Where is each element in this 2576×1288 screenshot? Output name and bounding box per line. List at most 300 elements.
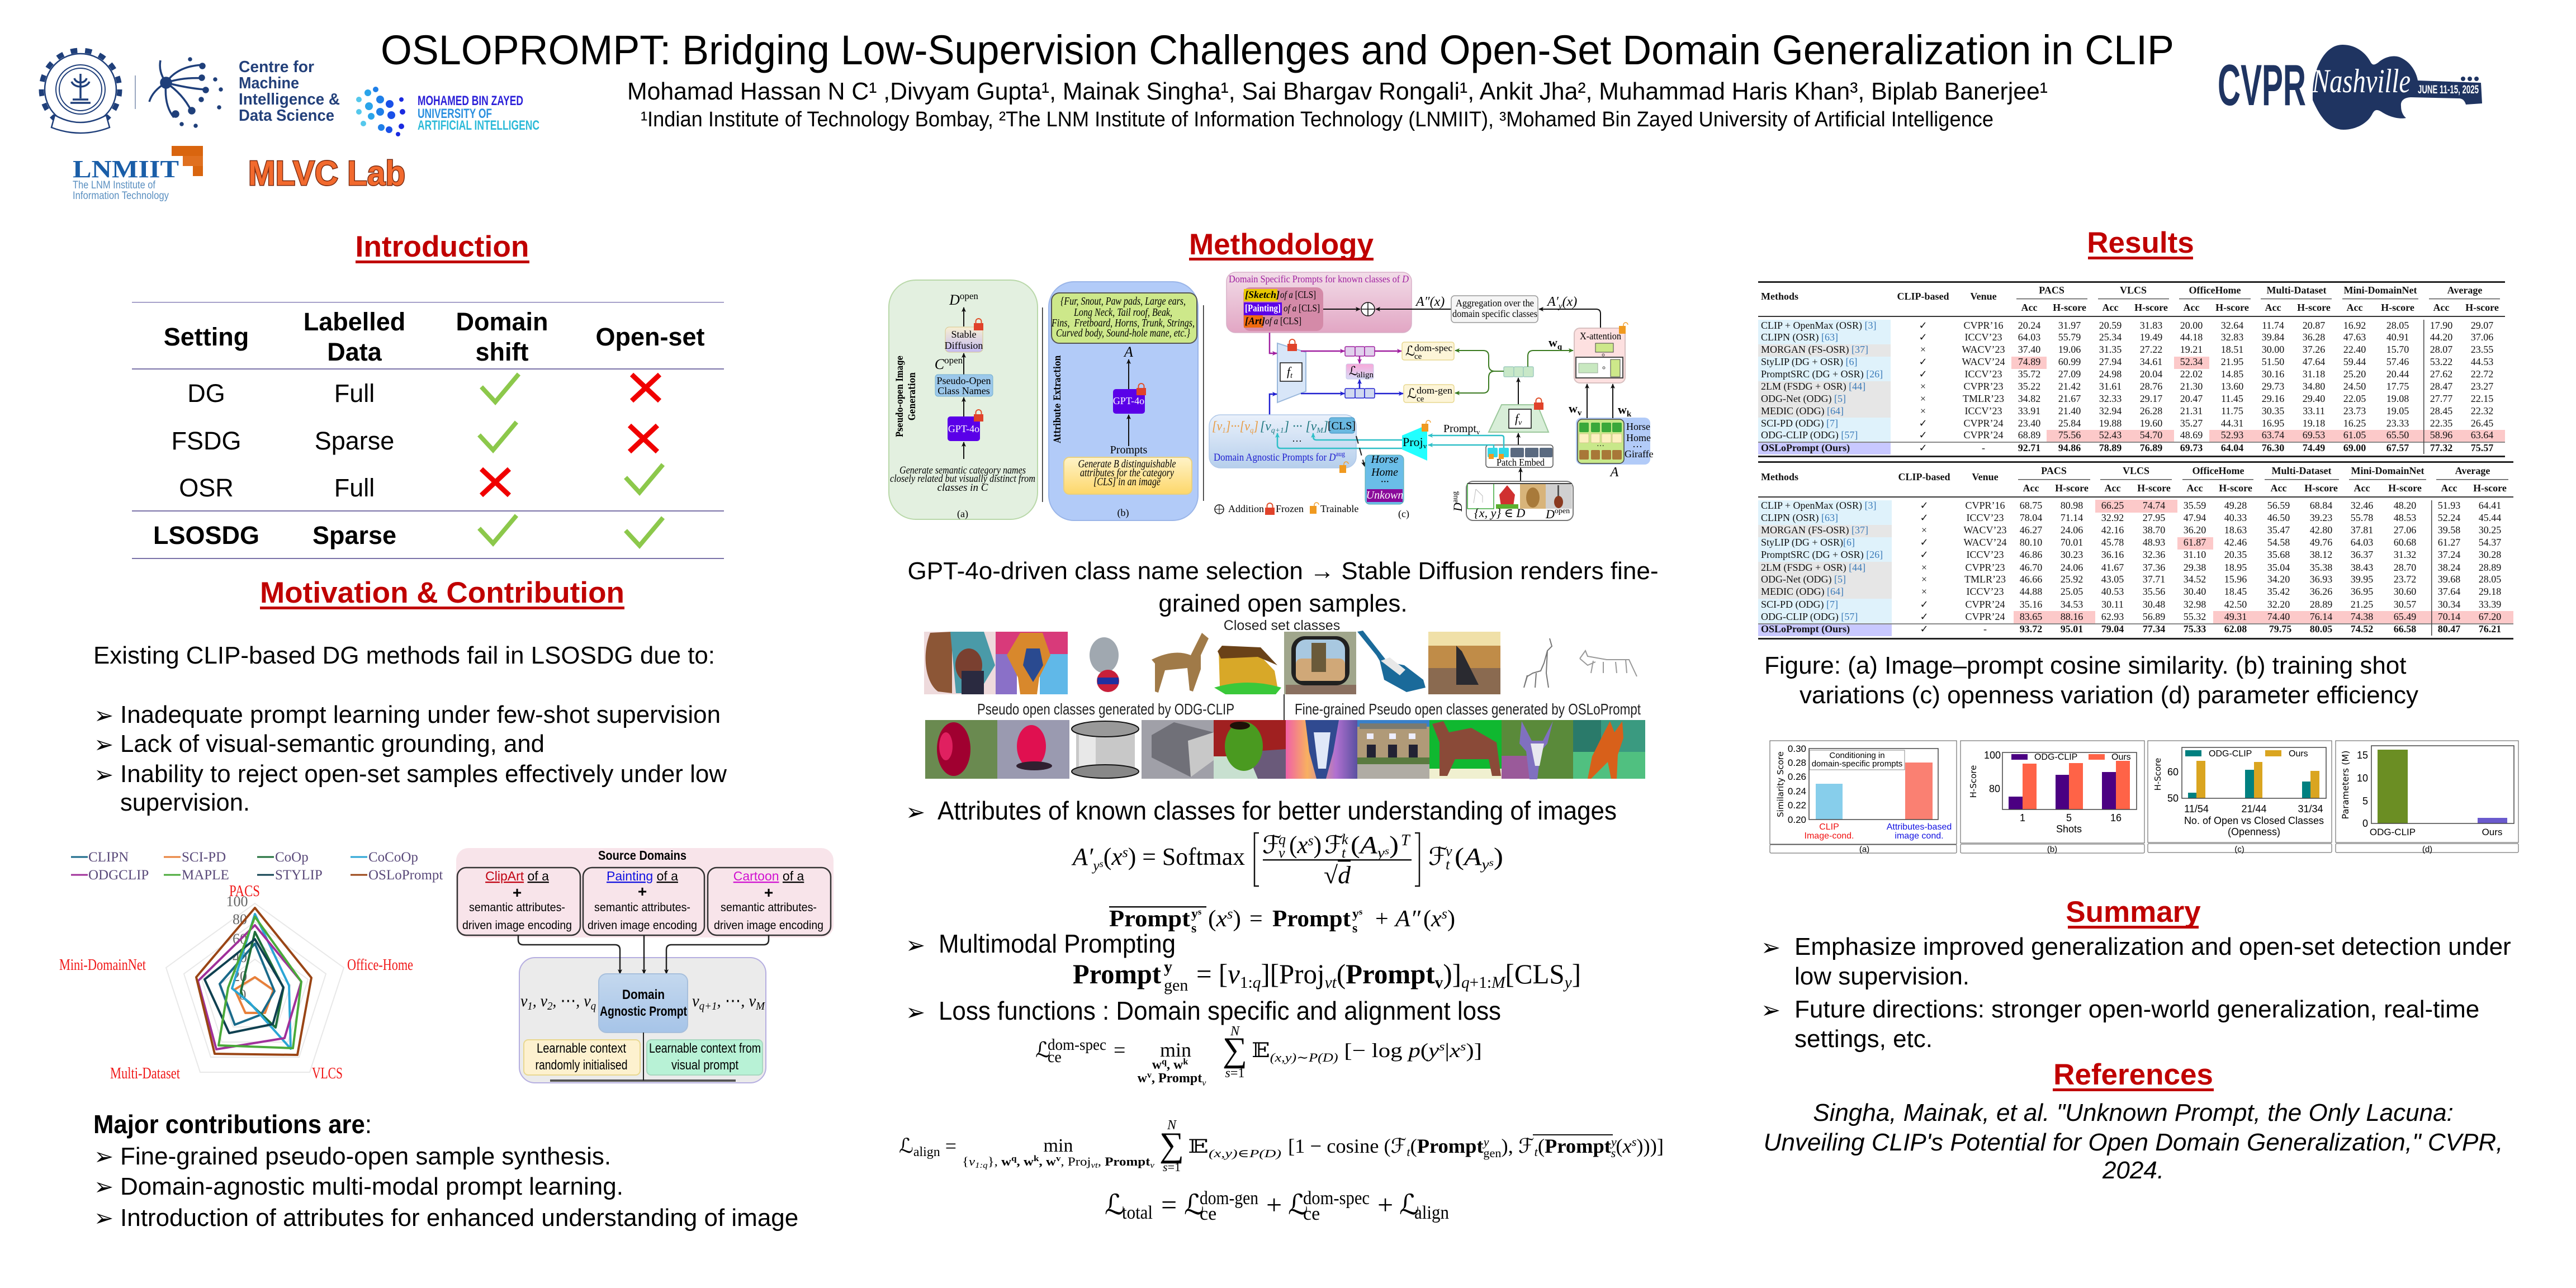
table: results 1: 32.94 [2099, 405, 2122, 416]
panel (b): attribute extraction: [CLS] in an image [1093, 476, 1161, 488]
equation: attribute attention: ) = Softmax [1128, 843, 1245, 870]
table: results 2: 35.42 [2267, 586, 2290, 597]
caption: GPT-4o pseudo open [908, 557, 1658, 617]
text: major contributions: Fine-grained pseudo-open sample synthesis. [120, 1143, 611, 1170]
equation: attribute attention: ℱ [1324, 831, 1344, 859]
table: results 1: 16.25 [2343, 418, 2366, 429]
table: results 2: 46.70 [2020, 562, 2042, 573]
table: results 1: 20.24 [2018, 320, 2040, 331]
chart (a): similarity score: Similarity Score [1775, 751, 1786, 817]
table: results 1: 58.96 [2430, 429, 2452, 441]
table: results 2: 32.98 [2184, 599, 2206, 610]
table: results 2: 38.24 [2438, 562, 2460, 573]
divider b/c [1203, 305, 1204, 501]
equation: alignment loss: t [1535, 1145, 1538, 1159]
table: results 2: 74.74 [2143, 500, 2165, 511]
table: results 1: 32.33 [2099, 393, 2122, 404]
table: results 2: CLIP + OpenMax (OSR) [3] [1761, 500, 1876, 512]
panel: source domains [456, 848, 834, 937]
table: results 1: 29.16 [2262, 393, 2284, 404]
table: results 2: 30.40 [2184, 586, 2206, 597]
panel: domain agnostic prompt: 2 [547, 1000, 552, 1012]
text: major contributions: ➢ [94, 1204, 113, 1232]
table: results 1: 53.22 [2430, 356, 2452, 367]
table: results 1: PromptSRC (DG + OSR) [26] [1761, 368, 1883, 380]
table: results 2: 61.27 [2438, 537, 2460, 548]
table: results 2: 54.58 [2267, 537, 2290, 548]
table: results 2: 36.37 [2351, 549, 2373, 560]
table: results 1: 26.28 [2140, 405, 2162, 416]
text: major contributions: Introduction of attributes for enhanced understanding of image [120, 1204, 798, 1232]
table: results 1: SCI-PD (ODG) [7] [1761, 418, 1838, 429]
equation: prompt update: s [1198, 907, 1201, 917]
panel: source domains: + [513, 884, 522, 901]
table: results 1: 74.49 [2303, 442, 2325, 453]
radar chart: Multi-Dataset [110, 1065, 180, 1082]
heading: References: References [2053, 1058, 2213, 1091]
table: results 2: × [1921, 562, 1927, 573]
domain specific prompts [1227, 272, 1412, 333]
table: setting comparison: Setting [164, 323, 249, 351]
equation: multimodal prompt: Prompt [1073, 958, 1161, 989]
panel: domain agnostic prompt: Agnostic Prompt [600, 1004, 687, 1019]
table: results 1: 60.99 [2058, 356, 2081, 367]
panel: domain agnostic prompt: M [755, 1000, 765, 1012]
equation: alignment loss: s [1611, 1146, 1616, 1160]
equation: total loss: ℒ [1105, 1189, 1125, 1220]
domain agnostic prompts: [v [1212, 419, 1223, 434]
table: results 2: 42.50 [2224, 599, 2247, 610]
table: results 2: H-score [2137, 482, 2171, 494]
equation: alignment loss: s=1 [1163, 1160, 1181, 1174]
addition and aggregation [1323, 295, 1600, 328]
attribute cells A: ··· [1632, 441, 1642, 452]
table: results 2: 64.41 [2479, 500, 2501, 511]
cyan projection arrows [1277, 433, 1504, 448]
table: results 1: ICCV’23 [1964, 332, 2002, 343]
table: results 1: 77.32 [2430, 442, 2452, 453]
equation: prompt update: s [1227, 906, 1233, 922]
table: results 1: 22.05 [2343, 393, 2366, 404]
domain specific prompts: of a [CLS] [1284, 302, 1320, 314]
equation: attribute attention [1071, 831, 1503, 889]
table: results 1: 69.73 [2180, 442, 2203, 453]
table: results 1: 75.57 [2471, 442, 2493, 453]
equation: multimodal prompt: [CLS [1505, 958, 1565, 989]
bullet: loss functions: Loss functions : Domain specific and alignment loss [939, 996, 1501, 1025]
equation: domain specific loss: (x,y)∼P(D) [1270, 1050, 1338, 1064]
panel (a): pseudo-open image generation: (a) [957, 508, 968, 520]
panel (a): pseudo-open image generation: D [949, 292, 960, 308]
table: results 1: 29.73 [2262, 381, 2284, 392]
table: results 2: 46.27 [2020, 524, 2042, 536]
table: results 1: 64.03 [2018, 332, 2040, 343]
table: results 1: 31.35 [2099, 344, 2122, 355]
heading: Methodology: Methodology [1189, 228, 1374, 261]
input images: {x, y} ∈ D [1474, 506, 1525, 520]
equation: domain specific loss: k [1183, 1057, 1188, 1067]
table: results 1: 29.40 [2303, 393, 2325, 404]
panel (b): attribute extraction: Long Neck, Tail roof, Beak, [1073, 306, 1172, 319]
panel: domain agnostic prompt: , ν [533, 992, 548, 1010]
table: results 2: MEDIC (ODG) [64] [1761, 586, 1844, 598]
table: results 2: 27.95 [2143, 512, 2165, 523]
table: results 1: 27.77 [2430, 393, 2452, 404]
table: results 1: OSLoPrompt (Ours) [1761, 442, 1850, 454]
table: results 2: StyLIP (DG + OSR)[6] [1761, 537, 1855, 548]
table: results 1: 75.56 [2058, 429, 2081, 441]
image encoder f_v: v [1518, 419, 1522, 427]
table: results 1: 18.51 [2221, 344, 2243, 355]
panel (b): attribute extraction: Fins, Fretboard, Horns, Trunk, Strings, [1051, 317, 1195, 329]
text: motivation: Existing CLIP-based DG methods fail in LSOSDG due to: [93, 642, 715, 669]
table: results 1: × [1920, 381, 1926, 392]
table: results 2: 49.28 [2224, 500, 2247, 511]
chart (d): parameters: 0 [2362, 818, 2368, 829]
table: results 2: Mini-DomainNet [2351, 465, 2424, 476]
table: results 2: TMLR’23 [1964, 574, 2006, 585]
table: results 1: ODG-Net (ODG) [5] [1761, 393, 1846, 405]
table: results 2: ✓ [1920, 500, 1929, 511]
loss boxes: align [1357, 371, 1374, 380]
panel: domain agnostic prompt: 1 [527, 1000, 533, 1012]
domain specific prompts: of a [CLS] [1265, 315, 1301, 326]
radar chart: Mini-DomainNet [59, 956, 146, 974]
table: results 1: 19.60 [2140, 418, 2162, 429]
equation: domain specific loss: x [1449, 1039, 1460, 1062]
logo: LNMIIT: LNMIIT [73, 155, 179, 183]
panel (c): OSLoPrompt architecture: w [1549, 335, 1557, 349]
logo: LNMIIT: The LNM Institute of [73, 179, 156, 191]
table: setting comparison: Domain [456, 307, 548, 336]
equation: alignment loss: N [1167, 1118, 1177, 1133]
table: results 2: - [1983, 623, 1987, 634]
addition and aggregation: (x) [1562, 295, 1577, 309]
equation: alignment loss: s [1632, 1135, 1636, 1149]
table: results 2: × [1921, 524, 1927, 536]
chart (b): shots: H-Score [1968, 765, 1978, 798]
equation: attribute attention: t [1446, 856, 1450, 873]
table: results 2: 71.14 [2061, 512, 2083, 523]
table: results 2: 29.38 [2184, 562, 2206, 573]
equation: alignment loss: t [1407, 1145, 1410, 1159]
table: results 1: 94.86 [2058, 442, 2081, 453]
table: results 2: 70.14 [2438, 611, 2460, 622]
table: results 1: 28.76 [2140, 381, 2162, 392]
table: results 2: 60.68 [2394, 537, 2416, 548]
domain agnostic prompts: ]···[v [1225, 419, 1250, 434]
equation: alignment loss: (x,y)∈P(D) [1209, 1148, 1281, 1160]
table: results 1: 27.22 [2140, 344, 2162, 355]
equation: domain specific loss: N [1230, 1024, 1240, 1039]
text: motivation: ➢ [94, 731, 113, 758]
text: summary bullets: Future directions: stronger open-world generalization, real-time [1794, 996, 2479, 1023]
table: results 1: H-score [2381, 302, 2414, 313]
table: results 2: 56.59 [2267, 500, 2290, 511]
text: summary bullets: ➢ [1761, 996, 1781, 1024]
equation: multimodal prompt: = [ν [1196, 958, 1240, 989]
equation: alignment loss: v [1150, 1161, 1154, 1170]
table: results 1: 11.45 [2221, 393, 2243, 404]
table: results 1: 25.84 [2058, 418, 2081, 429]
table: results 2: 61.87 [2184, 537, 2206, 548]
table: results 1: 40.91 [2386, 332, 2409, 343]
table: results 1: 44.18 [2180, 332, 2203, 343]
panel: domain agnostic prompt: visual prompt [671, 1058, 738, 1073]
equation: alignment loss: vt [1091, 1161, 1098, 1170]
attribute cells A: Home [1626, 432, 1651, 443]
panel (a): pseudo-open image generation: classes in C [937, 482, 988, 494]
class list: Unkown [1366, 489, 1403, 501]
equation: domain specific loss: s [1439, 1039, 1445, 1053]
table: results 1: 19.05 [2386, 405, 2409, 416]
equation: total loss: ℒ [1288, 1189, 1308, 1220]
equation: multimodal prompt: gen [1164, 976, 1188, 995]
table: results 1: 16.95 [2262, 418, 2284, 429]
table: results 2: 28.05 [2479, 574, 2501, 585]
equation: alignment loss: [1 − cosine (ℱ [1288, 1135, 1407, 1157]
table: results 2: Venue [1972, 471, 1999, 482]
table: results 2: 80.47 [2438, 623, 2460, 634]
equation: total loss: ℒ [1399, 1189, 1419, 1220]
panel (a): pseudo-open image generation: closely related but visually distinct from [890, 473, 1035, 485]
table: results 1: 22.32 [2471, 405, 2493, 416]
arrows: source domains to prompt [518, 935, 769, 974]
table: results 2: 25.92 [2061, 574, 2083, 585]
table: results 2: 39.58 [2438, 524, 2460, 536]
equation: attribute attention: y [1375, 845, 1385, 861]
table: results 2: 38.70 [2143, 524, 2165, 536]
equation: attribute attention: ℱ [1428, 843, 1448, 870]
equation: alignment loss: align [913, 1145, 940, 1159]
table: setting comparison: LSOSDG [153, 521, 259, 550]
table: results 2: 70.01 [2061, 537, 2083, 548]
equation: multimodal prompt: ( [1337, 958, 1346, 989]
equation: alignment loss: gen [1483, 1146, 1502, 1160]
table: results 2: 40.33 [2224, 512, 2247, 523]
table: results 1: Acc [2021, 302, 2037, 313]
table: results 2: 36.26 [2310, 586, 2332, 597]
domain agnostic prompts [1209, 415, 1356, 473]
table: results 1: 22.02 [2180, 368, 2203, 380]
table: results 2: 68.75 [2020, 500, 2042, 511]
label D aug: D [1451, 503, 1465, 512]
table: results 2: H-score [2388, 482, 2422, 494]
table: results 2: ✓ [1920, 512, 1929, 523]
text: motivation: Inadequate prompt learning under few-shot supervision [120, 701, 721, 728]
equation: multimodal prompt: v [1435, 973, 1443, 992]
chart (c): openness: No. of Open vs Closed Classes [2184, 815, 2324, 826]
radar legend: STYLIP [275, 868, 323, 883]
table: results 1: StyLIP (DG + OSR) [6] [1761, 356, 1857, 368]
chart (d): parameters: (d) [2422, 845, 2432, 854]
table: setting comparison: FSDG [171, 427, 242, 455]
chart (a): similarity score: 0.20 [1788, 815, 1806, 825]
radar chart [59, 850, 443, 1082]
table: results 1: × [1920, 405, 1926, 416]
equation: total loss: total [1122, 1202, 1153, 1223]
Proj_v: v [1423, 442, 1427, 450]
table: results 1: PACS [2039, 285, 2064, 296]
table: results 2: 35.56 [2143, 586, 2165, 597]
table: results 2: 35.47 [2267, 524, 2290, 536]
table: results 1: 22.35 [2430, 418, 2452, 429]
table: results 1: 14.85 [2221, 368, 2243, 380]
logo: LNMIIT: Information Technology [73, 190, 169, 202]
chart (b): shots: 100 [1984, 750, 2001, 761]
table: results 1: ✓ [1919, 356, 1928, 367]
domain agnostic prompts: [v [1260, 419, 1271, 434]
table: results 1: 51.50 [2262, 356, 2284, 367]
panel: domain agnostic prompt [518, 935, 769, 1083]
dashed classifier link [1356, 436, 1365, 466]
table: results 2: Multi-Dataset [2272, 465, 2331, 476]
table: results 1: Average [2447, 285, 2482, 296]
table: results 2: 76.21 [2479, 623, 2501, 634]
table: results 2: OfficeHome [2193, 465, 2244, 476]
chart (a): similarity score: 0.28 [1788, 757, 1806, 768]
table: results 2: 30.34 [2438, 599, 2460, 610]
equation: total loss: + [1266, 1189, 1282, 1220]
table: results 2: 20.35 [2224, 549, 2247, 560]
equation: domain specific loss: ℒ [1035, 1039, 1050, 1062]
equation: multimodal prompt: ] [1572, 958, 1581, 989]
heading: Introduction: Introduction [356, 230, 529, 263]
radar legend: SCI-PD [182, 850, 226, 865]
text: reference: 2024. [2102, 1157, 2164, 1184]
chart (c): openness: (c) [2234, 845, 2244, 854]
logo: IIT Bombay emblem [41, 50, 120, 133]
panel (a): pseudo-open image generation [889, 280, 1038, 520]
chart (a): similarity score: image cond. [1895, 831, 1944, 841]
text: summary bullets [1761, 933, 2511, 1053]
chart (c): openness: 50 [2167, 793, 2179, 804]
text: summary bullets: ➢ [1761, 934, 1781, 961]
table: results 1: 29.17 [2140, 393, 2162, 404]
table: results 2: 68.84 [2310, 500, 2332, 511]
table: results 1: 23.73 [2343, 405, 2366, 416]
table: results 1: 32.83 [2221, 332, 2243, 343]
equation: alignment loss: 𝔼 [1188, 1137, 1202, 1157]
table: setting comparison: shift [475, 338, 529, 366]
label: closed set classes: Closed set classes [1224, 618, 1340, 633]
table: results 1: 33.11 [2303, 405, 2325, 416]
chart (c): openness: 11/54 [2184, 803, 2209, 815]
diagram legend: Trainable [1320, 503, 1358, 514]
table: results 1: 92.71 [2018, 442, 2040, 453]
domain agnostic prompts: 1 [1222, 427, 1226, 435]
table: results 2: 39.23 [2310, 512, 2332, 523]
logo: CMInDS wordmark [239, 58, 340, 125]
loss boxes: ℒ [1407, 387, 1417, 401]
table: results 1: Methods [1761, 291, 1798, 302]
equation: attribute attention: ) [1314, 831, 1322, 859]
label D aug: aug [1451, 491, 1460, 503]
table: results 2: × [1921, 586, 1927, 597]
panel: source domains: semantic attributes- [721, 901, 817, 914]
domain agnostic prompts: ] [1323, 419, 1328, 434]
chart (c): openness: (Openness) [2228, 826, 2280, 837]
domain agnostic prompts: M [1316, 427, 1324, 435]
table: results 2: H-score [2304, 482, 2338, 494]
equation: multimodal prompt: +1:M [1470, 973, 1505, 992]
logo: MBZUAI wordmark: ARTIFICIAL INTELLIGENC [418, 118, 539, 133]
table: results 1: 47.63 [2343, 332, 2366, 343]
equation: multimodal prompt: )] [1443, 958, 1461, 989]
panel (b): attribute extraction: Curved body, Sound-hole mane, etc.} [1056, 327, 1190, 339]
feature cells [1345, 347, 1533, 398]
heading: Results: Results [2087, 226, 2194, 259]
table: results 1: 47.64 [2303, 356, 2325, 367]
bullet: multimodal prompting: Multimodal Prompting [939, 929, 1176, 958]
table: results 1: CLIPN (OSR) [63] [1761, 332, 1838, 343]
table: results 2: 46.66 [2020, 574, 2042, 585]
equation: domain specific loss: )] [1466, 1039, 1482, 1062]
radar chart: 60 [233, 931, 247, 947]
table: results 2: 42.46 [2224, 537, 2247, 548]
table: results 2: PromptSRC (DG + OSR) [26] [1761, 549, 1883, 561]
logo: MLVC Lab: MLVC Lab [248, 154, 405, 193]
table: results 2: 55.32 [2184, 611, 2206, 622]
table: results 2: WACV’24 [1963, 537, 2007, 548]
table: results 1: 65.50 [2386, 429, 2409, 441]
table: results 2: 37.64 [2438, 586, 2460, 597]
table: results 2: 56.89 [2143, 611, 2165, 622]
equation: alignment loss: Prompt [1105, 1154, 1150, 1168]
table: results 2: CLIP-based [1898, 471, 1950, 482]
diagram legend [1215, 503, 1358, 515]
table: results 1: ICCV’23 [1964, 368, 2002, 380]
chart (b): shots: 5 [2066, 812, 2072, 823]
table: results 1: Mini-DomainNet [2344, 285, 2417, 296]
equation: prompt update: ) [1447, 906, 1455, 932]
equation: prompt update: y [1352, 907, 1359, 921]
panel: source domains: + [764, 884, 773, 901]
chart (a): similarity score: (a) [1859, 845, 1869, 854]
panel (c): OSLoPrompt architecture [1209, 272, 1654, 521]
radar legend: ODGCLIP [88, 868, 149, 883]
equation: domain specific loss: ∑ [1223, 1031, 1247, 1069]
table: results 2: Acc [2023, 482, 2039, 494]
table: setting comparison: OSR [179, 473, 234, 502]
equation: total loss: dom-spec [1303, 1188, 1370, 1209]
table: setting comparison: Labelled [304, 307, 405, 336]
table: results 2: 39.68 [2438, 574, 2460, 585]
table: results 1: 21.95 [2221, 356, 2243, 367]
table: setting comparison: Sparse [312, 521, 396, 550]
table: results 1 [1758, 281, 2505, 457]
domain agnostic prompts: ] [1253, 419, 1258, 434]
bullet: attributes: Attributes of known classes for better understanding of images [937, 796, 1617, 825]
table: results 2: 52.24 [2438, 512, 2460, 523]
logo: CVPR Nashville: JUNE 11-15, 2025 [2418, 83, 2479, 96]
chart (d): parameters: Ours [2482, 827, 2502, 837]
text: motivation: Lack of visual-semantic grounding, and [120, 730, 544, 757]
table: results 1: 28.45 [2430, 405, 2452, 416]
domain specific prompts: [Painting] [1245, 302, 1281, 314]
equation: alignment loss: , Proj [1060, 1154, 1091, 1168]
domain specific prompts: of a [CLS] [1280, 289, 1316, 300]
equation: attribute attention: s [1385, 845, 1389, 856]
attribute cells A: A [1609, 465, 1619, 480]
table: results 1: 19.18 [2303, 418, 2325, 429]
equation: prompt update: A″ [1394, 906, 1421, 932]
table: results 2: 30.48 [2143, 599, 2165, 610]
table: results 1: 76.89 [2140, 442, 2162, 453]
table: results 2: 21.25 [2351, 599, 2373, 610]
equation: attribute attention: x [1111, 843, 1123, 870]
table: results 2: 66.58 [2394, 623, 2416, 634]
